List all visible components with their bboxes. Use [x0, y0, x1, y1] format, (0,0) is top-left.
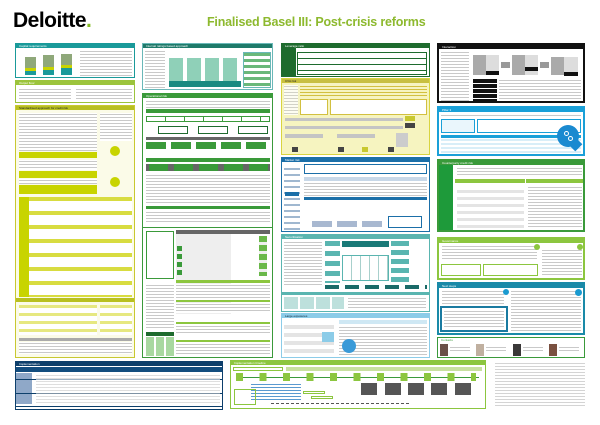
panel: market risk (blue): Market risk	[285, 158, 300, 162]
panel: teal: Next steps	[442, 284, 456, 288]
panel: standardised approach credit risk (yellow)	[15, 105, 135, 358]
panel: IRB diagram (teal light)	[142, 43, 273, 90]
sub heading	[16, 298, 134, 302]
panel: standardised approach credit risk (yellow): Standardised approach for credit risk	[19, 106, 68, 110]
panel: credit valuation adjustment (yellow)	[281, 78, 430, 155]
panel: contacts: Contacts	[441, 338, 453, 342]
panel: market risk (blue)	[281, 157, 430, 232]
panel: black bordered: Interaction	[442, 45, 456, 49]
panel: securitisation (teal)	[281, 234, 430, 312]
panel: counterparty (green)	[437, 159, 585, 232]
panel: leverage ratio (dark green)	[281, 43, 430, 77]
panel: large exposures (light blue)	[281, 313, 430, 358]
icon: lightbulb with gears	[557, 125, 582, 152]
icons: green circles	[534, 244, 540, 250]
panel: disclosure (blue)	[437, 106, 585, 156]
icons: yellow circles	[110, 146, 120, 156]
panel: timeline	[230, 360, 486, 409]
logo: Deloitte.	[13, 9, 91, 32]
panel: capital overview (teal): Capital requirements	[19, 44, 47, 48]
timeline nodes	[236, 373, 476, 381]
chart: stacked bars	[25, 54, 72, 75]
panel: output floor (green-lime)	[15, 80, 135, 103]
panel: lime	[437, 237, 585, 280]
panel: securitisation (teal): Securitisation	[285, 235, 303, 239]
panel: credit valuation adjustment (yellow): CVA risk	[285, 79, 296, 83]
panel: disclosure (blue): Pillar 3	[442, 108, 451, 112]
panel: contacts	[437, 337, 585, 358]
panel: teal	[437, 282, 585, 335]
title: Finalised Basel III: Post-crisis reforms	[207, 15, 425, 29]
panel: capital overview (teal)	[15, 43, 135, 78]
panel: bottom table (navy): Implementation	[19, 362, 40, 366]
text block: footnotes	[495, 362, 585, 408]
panel: black bordered	[437, 43, 585, 103]
panel: lime: Governance	[442, 239, 458, 243]
panel: timeline: Implementation timeline	[234, 361, 266, 365]
table rows	[19, 197, 132, 297]
panel: operational risk / large green: Operational risk	[146, 94, 167, 98]
panel: large exposures (light blue): Large exposures	[285, 314, 307, 318]
panel: bottom table (navy)	[15, 361, 223, 410]
panel: output floor (green-lime): Output floor	[19, 81, 35, 85]
panel: leverage ratio (dark green): Leverage ratio	[285, 44, 304, 48]
icon: blue circle	[342, 339, 356, 353]
panel: operational risk / large green	[142, 93, 273, 358]
panel: IRB diagram (teal light): Internal ratings based approach	[146, 44, 188, 48]
panel: counterparty (green): Counterparty credit risk	[442, 161, 473, 165]
